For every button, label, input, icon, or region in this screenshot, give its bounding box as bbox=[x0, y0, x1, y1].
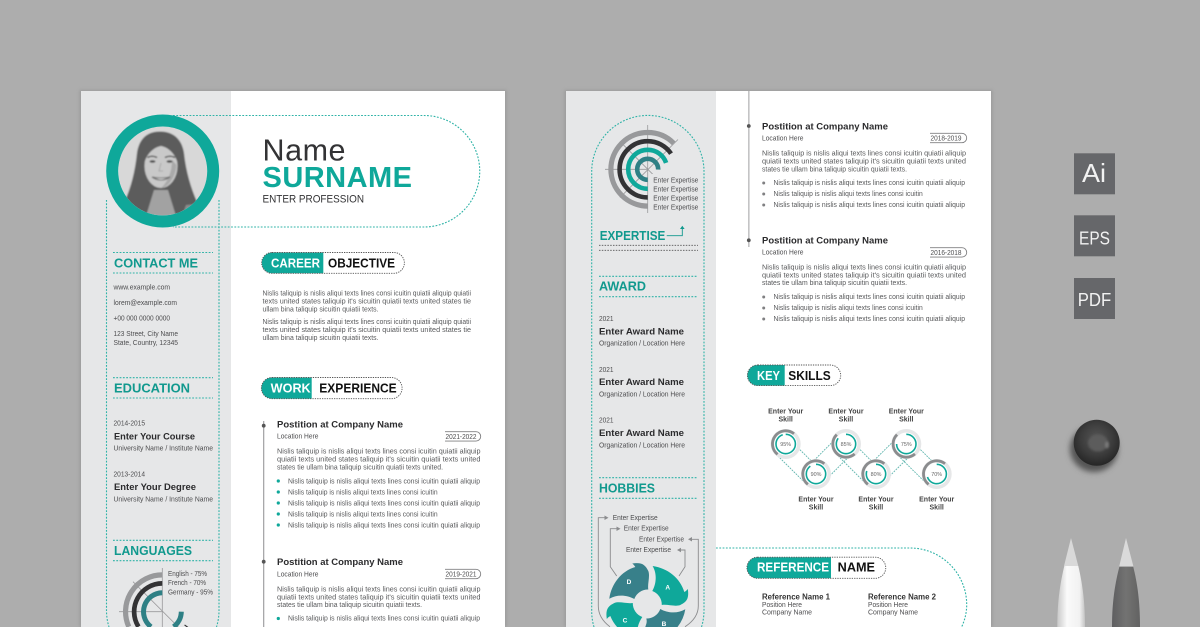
section heading: expertise with arrow bbox=[599, 226, 698, 250]
job entry 2016-2018: Nislis taliquip is nislis aliqui texts lines consi icuitin quiatii aliquip bbox=[774, 316, 965, 323]
section: education: EDUCATION bbox=[114, 380, 190, 395]
chart: expertise radial bars bbox=[605, 125, 701, 213]
section: contact me: CONTACT ME bbox=[114, 255, 198, 270]
gauge 75% bbox=[888, 425, 925, 463]
section: hobbies: Enter Expertise bbox=[626, 545, 671, 554]
icon: Ai badge: Ai bbox=[1082, 158, 1106, 188]
section: education bbox=[113, 378, 213, 503]
text block: career objective: texts united states taliquip it's sicuitin quiatii texts united states tie bbox=[262, 327, 471, 334]
gauge 95%: 95% bbox=[780, 442, 791, 448]
section: award: 2021 bbox=[599, 416, 614, 424]
chart: cycle diagram: C bbox=[623, 617, 628, 624]
section: award: Enter Award Name bbox=[599, 377, 684, 388]
skill labels: Enter Your bbox=[858, 497, 894, 504]
job entry 2016-2018: states tie ullam bina taliquip sicuitin quiatii texts. bbox=[762, 280, 907, 287]
section: contact me: lorem@example.com bbox=[114, 298, 177, 307]
section: hobbies: Enter Expertise bbox=[639, 534, 684, 543]
section: contact me: 123 Street, City Name bbox=[114, 329, 178, 338]
job entry 2019-2021: 2019-2021 bbox=[446, 570, 476, 579]
skill labels: Skill bbox=[839, 416, 853, 423]
text block: reference 1 bbox=[762, 592, 831, 616]
text block: career objective: Nislis taliquip is nislis aliqui texts lines consi icuitin quiatii aliquip quiatii bbox=[262, 319, 471, 326]
job entry 2021-2022: Postition at Company Name bbox=[277, 419, 403, 430]
job entry 2021-2022: Nislis taliquip is nislis aliqui texts lines consi icuitin quiatii aliquip bbox=[288, 500, 480, 507]
chart: expertise radial bars: Enter Expertise bbox=[653, 185, 698, 194]
job entry 2019-2021: states tie ullam bina taliquip sicuitin quiatii texts. bbox=[277, 602, 422, 609]
skill labels: Enter Your bbox=[768, 408, 804, 415]
section: languages: Germany - 95% bbox=[168, 587, 214, 596]
heading: career objective bbox=[262, 252, 404, 273]
job entry 2018-2019: 2018-2019 bbox=[930, 134, 962, 143]
profile photo bbox=[112, 120, 213, 222]
title: name: ENTER PROFESSION bbox=[262, 194, 364, 206]
job entry 2018-2019: quiatii texts united states taliquip it's sicuitin quiatii texts united bbox=[762, 158, 966, 165]
section: contact me bbox=[113, 252, 213, 347]
skill labels: Skill bbox=[778, 416, 793, 423]
heading: key skills bbox=[747, 365, 841, 386]
gauge 85% bbox=[827, 425, 865, 463]
icon: PDF badge bbox=[1074, 278, 1115, 319]
job entry 2019-2021: Postition at Company Name bbox=[277, 557, 403, 568]
skill labels: Skill bbox=[869, 505, 883, 512]
gauge 70% bbox=[918, 455, 955, 493]
gauge 90%: 90% bbox=[811, 472, 822, 478]
section: hobbies: Enter Expertise bbox=[613, 513, 658, 522]
heading: reference name: NAME bbox=[838, 561, 875, 575]
title: name bbox=[262, 134, 412, 206]
skill labels: Enter Your bbox=[889, 408, 924, 415]
heading: reference name bbox=[747, 557, 886, 578]
text block: reference 2 bbox=[868, 592, 937, 616]
panel: resume page one bbox=[80, 90, 506, 627]
job entry 2019-2021: Nislis taliquip is nislis aliqui texts lines consi icuitin quiatii aliquip bbox=[288, 616, 480, 623]
icon: EPS badge bbox=[1074, 215, 1115, 256]
arrows: hobby connectors bbox=[598, 516, 698, 627]
chart: cycle diagram: D bbox=[627, 579, 632, 586]
job entry 2018-2019: Nislis taliquip is nislis aliqui texts lines consi icuitin quiatii aliquip bbox=[762, 150, 966, 157]
job entry 2018-2019 bbox=[762, 121, 967, 209]
job entry 2021-2022: Nislis taliquip is nislis aliqui texts lines consi icuitin quiatii aliquip bbox=[288, 522, 480, 529]
section: award: Enter Award Name bbox=[599, 326, 684, 337]
decoration: white pen bbox=[1057, 538, 1085, 627]
section: education: Enter Your Course bbox=[114, 431, 195, 442]
gauge 70%: 70% bbox=[931, 472, 942, 478]
chart: cycle diagram bbox=[606, 563, 688, 627]
job entry 2016-2018 bbox=[762, 236, 967, 323]
section heading: expertise with arrow: EXPERTISE bbox=[600, 228, 666, 243]
job entry 2016-2018: Nislis taliquip is nislis aliqui texts lines consi icuitin bbox=[774, 305, 923, 312]
gauge 80%: 80% bbox=[871, 472, 882, 478]
gauge 75%: 75% bbox=[901, 442, 912, 448]
dashed sidebar arch bbox=[592, 115, 704, 627]
heading: key skills: KEY bbox=[757, 369, 781, 383]
job entry 2016-2018: Postition at Company Name bbox=[762, 236, 888, 247]
job entry 2016-2018: Location Here bbox=[762, 248, 804, 257]
chart: expertise radial bars: Enter Expertise bbox=[653, 202, 698, 211]
job entry 2019-2021: quiatii texts united states taliquip it's sicuitin quiatii texts united bbox=[277, 594, 481, 601]
text block: reference 2: Position Here bbox=[868, 600, 908, 609]
job entry 2021-2022: Nislis taliquip is nislis aliqui texts lines consi icuitin bbox=[288, 489, 438, 496]
skill labels: Skill bbox=[929, 505, 944, 512]
gauge 80% bbox=[857, 455, 895, 493]
section: education: University Name / Institute Name bbox=[114, 494, 213, 503]
icon: PDF badge: PDF bbox=[1078, 290, 1111, 310]
text block: career objective: Nislis taliquip is nislis aliqui texts lines consi icuitin quiatii aliquip quiatii bbox=[262, 291, 471, 298]
job entry 2021-2022: Nislis taliquip is nislis aliqui texts lines consi icuitin quiatii aliquip bbox=[288, 478, 480, 485]
section: contact me: State, Country, 12345 bbox=[114, 338, 178, 347]
section: languages: English - 75% bbox=[168, 569, 208, 578]
text block: reference 1: Reference Name 1 bbox=[762, 592, 831, 601]
job entry 2021-2022: Location Here bbox=[277, 432, 319, 441]
heading: career objective: OBJECTIVE bbox=[328, 256, 395, 270]
decoration: grey pen bbox=[1112, 538, 1140, 627]
skill labels bbox=[768, 408, 955, 512]
gauge 85%: 85% bbox=[841, 442, 852, 448]
chart: expertise radial bars: Enter Expertise bbox=[653, 175, 698, 184]
timeline: work experience bbox=[262, 421, 266, 627]
skill labels: Skill bbox=[809, 505, 823, 512]
chart: language radial bars bbox=[119, 568, 187, 627]
heading: reference name: REFERENCE bbox=[757, 561, 829, 575]
job entry 2021-2022: Nislis taliquip is nislis aliqui texts lines consi icuitin bbox=[288, 511, 438, 518]
job entry 2019-2021: Location Here bbox=[277, 569, 319, 578]
text block: career objective: texts united states taliquip it's sicuitin quiatii texts united states tie bbox=[262, 299, 471, 306]
section: education: 2013-2014 bbox=[114, 470, 145, 479]
section: languages bbox=[113, 540, 214, 627]
section: award: Enter Award Name bbox=[599, 428, 684, 439]
job entry 2019-2021: Nislis taliquip is nislis aliqui texts lines consi icuitin quiatii aliquip bbox=[277, 586, 481, 593]
section: contact me: +00 000 0000 0000 bbox=[114, 314, 170, 323]
job entry 2019-2021 bbox=[277, 557, 481, 623]
job entry 2018-2019: states tie ullam bina taliquip sicuitin quiatii texts. bbox=[762, 166, 907, 173]
section: award: AWARD bbox=[599, 279, 646, 294]
heading: key skills: SKILLS bbox=[788, 369, 831, 383]
skill labels: Enter Your bbox=[828, 408, 864, 415]
job entry 2018-2019: Nislis taliquip is nislis aliqui texts lines consi icuitin quiatii aliquip bbox=[774, 180, 965, 187]
job entry 2021-2022: states tie ullam bina taliquip sicuitin quiatii texts united. bbox=[277, 464, 443, 471]
section: education: 2014-2015 bbox=[114, 419, 145, 428]
section: languages: French - 70% bbox=[168, 578, 207, 587]
job entry 2021-2022: Nislis taliquip is nislis aliqui texts lines consi icuitin quiatii aliquip bbox=[277, 449, 481, 456]
section: languages: LANGUAGES bbox=[114, 543, 192, 558]
job entry 2021-2022 bbox=[277, 419, 481, 529]
timeline: page two bbox=[747, 91, 751, 247]
dashed header and sidebar outline bbox=[106, 116, 480, 627]
chart: key skills zigzag gauges bbox=[767, 408, 955, 512]
job entry 2016-2018: Nislis taliquip is nislis aliqui texts lines consi icuitin quiatii aliquip bbox=[774, 294, 965, 301]
decoration: black ball bbox=[1070, 420, 1120, 472]
job entry 2016-2018: Nislis taliquip is nislis aliqui texts lines consi icuitin quiatii aliquip bbox=[762, 264, 966, 271]
job entry 2018-2019: Location Here bbox=[762, 134, 804, 143]
section: education: Enter Your Degree bbox=[114, 482, 196, 493]
job entry 2016-2018: 2016-2018 bbox=[930, 248, 962, 257]
skill labels: Enter Your bbox=[919, 497, 955, 504]
icon: Ai badge bbox=[1074, 153, 1115, 194]
chart: cycle diagram: A bbox=[665, 585, 670, 592]
title: name: SURNAME bbox=[262, 162, 412, 194]
section: award: 2021 bbox=[599, 365, 614, 374]
dashed reference outline bbox=[716, 548, 967, 627]
heading: work experience: WORK bbox=[271, 381, 311, 395]
section: hobbies: Enter Expertise bbox=[624, 524, 669, 533]
heading: career objective: CAREER bbox=[271, 256, 320, 270]
section: award: Organization / Location Here bbox=[599, 390, 685, 398]
section: contact me: www.example.com bbox=[113, 282, 170, 291]
job entry 2021-2022: quiatii texts united states taliquip it's sicuitin quiatii texts united bbox=[277, 457, 481, 464]
section: hobbies bbox=[598, 478, 698, 627]
chart: expertise radial bars: Enter Expertise bbox=[653, 194, 698, 203]
job entry 2018-2019: Nislis taliquip is nislis aliqui texts lines consi icuitin bbox=[774, 191, 923, 198]
skill labels: Skill bbox=[899, 416, 914, 423]
panel: resume page two bbox=[564, 90, 992, 627]
section: hobbies: HOBBIES bbox=[599, 480, 655, 495]
job entry 2018-2019: Postition at Company Name bbox=[762, 121, 888, 132]
section: education: University Name / Institute Name bbox=[114, 444, 213, 453]
text block: career objective: ullam bina taliquip sicuitin quiatii texts. bbox=[262, 335, 379, 342]
section: award: Organization / Location Here bbox=[599, 440, 685, 450]
section: award: 2021 bbox=[599, 314, 614, 323]
job entry 2021-2022: 2021-2022 bbox=[446, 432, 476, 441]
text block: career objective: ullam bina taliquip sicuitin quiatii texts. bbox=[262, 306, 379, 314]
icon: EPS badge: EPS bbox=[1079, 228, 1110, 248]
gauge 90% bbox=[797, 455, 835, 493]
job entry 2016-2018: quiatii texts united states taliquip it's sicuitin quiatii texts united bbox=[762, 272, 966, 279]
skill labels: Enter Your bbox=[798, 497, 834, 504]
text block: career objective bbox=[262, 291, 471, 342]
gauge 95% bbox=[767, 425, 804, 463]
title: name: Name bbox=[262, 134, 346, 168]
heading: work experience bbox=[261, 378, 402, 399]
text block: reference 2: Company Name bbox=[868, 607, 918, 616]
text block: reference 1: Position Here bbox=[762, 600, 802, 609]
job entry 2018-2019: Nislis taliquip is nislis aliqui texts lines consi icuitin quiatii aliquip bbox=[774, 202, 965, 209]
section: award: Organization / Location Here bbox=[599, 339, 685, 348]
text block: reference 2: Reference Name 2 bbox=[868, 592, 937, 601]
text block: reference 1: Company Name bbox=[762, 607, 812, 616]
heading: work experience: EXPERIENCE bbox=[319, 381, 397, 395]
section: award bbox=[599, 276, 698, 450]
